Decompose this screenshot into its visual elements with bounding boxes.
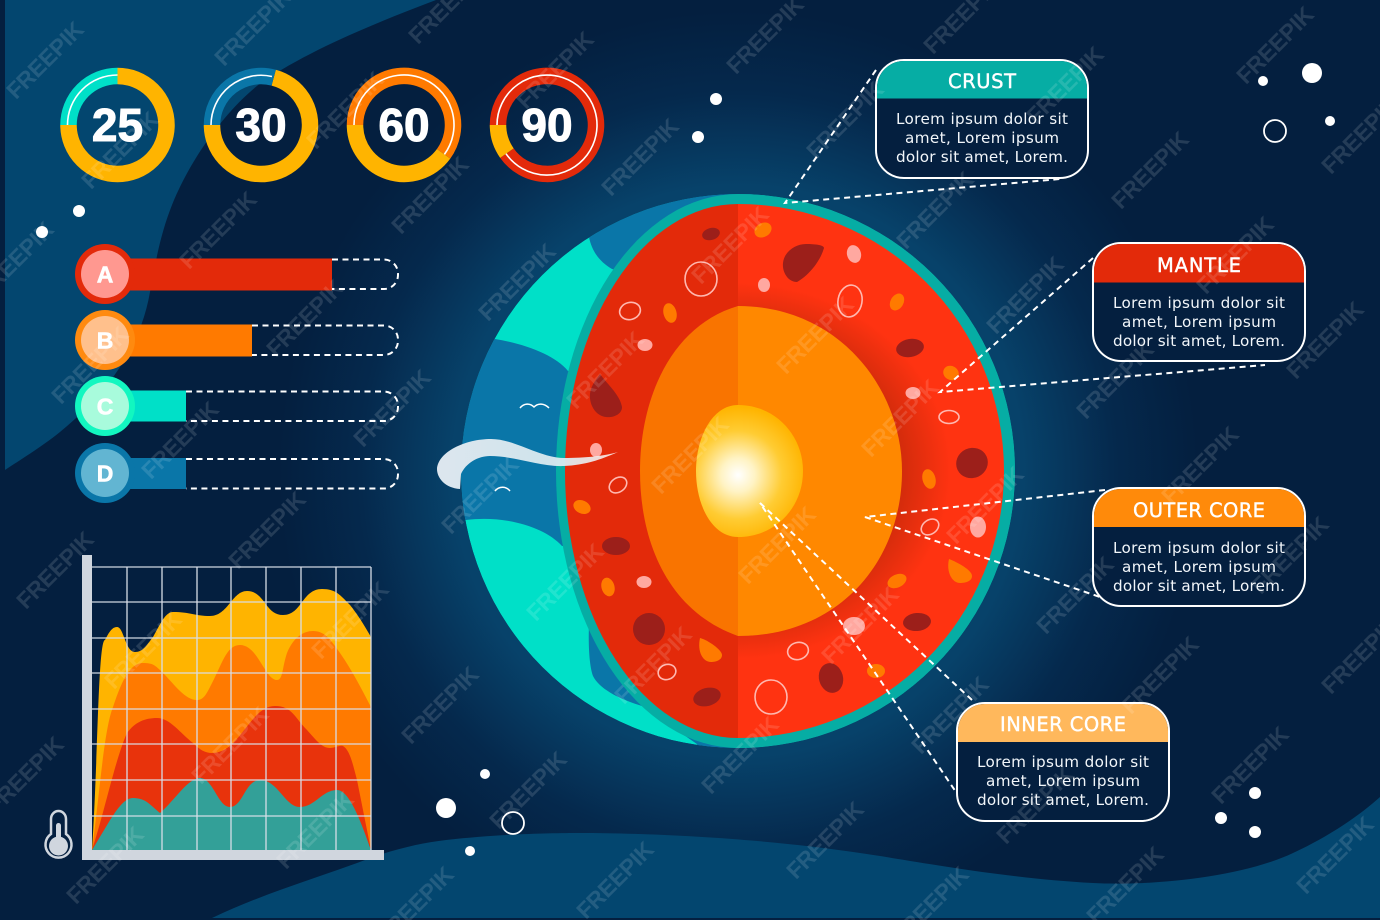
callout: mantle: MANTLE [1157,254,1241,277]
bar B: B [97,328,113,354]
watermark text: FREEPIK [46,321,134,409]
watermark text: FREEPIK [174,186,262,274]
callout: inner core [957,703,1169,821]
callout: outer core: amet, Lorem ipsum [1122,558,1276,576]
bar B [75,310,398,370]
icon: birds [495,404,549,491]
watermark text: FREEPIK [306,576,394,664]
callout: inner core: INNER CORE [1000,713,1126,736]
outer core right half [738,306,902,636]
progress ring 60 [354,75,454,174]
callout: outer core: dolor sit amet, Lorem. [1113,577,1285,595]
watermark text: FREEPIK [1291,811,1379,899]
leader lines [760,70,1265,795]
watermark text: FREEPIK [1156,421,1244,509]
watermark text: FREEPIK [1281,296,1369,384]
callout: mantle [1093,243,1305,361]
icon: thermometer [46,811,72,858]
callout: crust: Lorem ipsum dolor sit [896,110,1068,128]
callout: crust: amet, Lorem ipsum [905,129,1059,147]
watermark text: FREEPIK [348,364,436,452]
watermark text: FREEPIK [1191,211,1279,299]
watermark text: FREEPIK [436,451,524,539]
callout: mantle: amet, Lorem ipsum [1122,313,1276,331]
inner core [696,405,803,537]
watermark text: FREEPIK [906,671,994,759]
callout: outer core [1093,488,1305,606]
area: red [92,706,371,850]
watermark text: FREEPIK [76,106,164,194]
watermark text: FREEPIK [223,486,311,574]
watermark text: FREEPIK [61,821,149,909]
chart grid [92,567,371,850]
watermark text: FREEPIK [781,796,869,884]
watermark text: FREEPIK [301,66,389,154]
progress ring 25 [68,75,166,174]
callout: crust [876,60,1088,178]
progress ring 90: 90 [521,99,573,151]
bar C [75,376,398,436]
watermark text: FREEPIK [609,621,697,709]
callout: crust: dolor sit amet, Lorem. [896,148,1068,166]
watermark text: FREEPIK [473,238,561,326]
watermark text: FREEPIK [271,786,359,874]
watermark text: FREEPIK [991,761,1079,849]
watermark text: FREEPIK [484,746,572,834]
watermark text: FREEPIK [1031,551,1119,639]
progress ring 90 [497,75,597,175]
area: orange [92,631,371,850]
bar D [75,443,398,503]
watermark text: FREEPIK [99,606,187,694]
watermark text: FREEPIK [186,701,274,789]
watermark text: FREEPIK [696,711,784,799]
watermark text: FREEPIK [1231,1,1319,89]
watermark text: FREEPIK [1206,721,1294,809]
area chart [82,555,384,860]
watermark text: FREEPIK [891,166,979,254]
watermark text: FREEPIK [686,201,774,289]
crust [556,194,1015,748]
callout: mantle: Lorem ipsum dolor sit [1113,294,1285,312]
mantle right half [738,204,1004,738]
mantle rocks [571,219,993,714]
watermark text: FREEPIK [261,274,349,362]
watermark text: FREEPIK [1106,126,1194,214]
globe ocean/land [440,180,1015,760]
watermark text: FREEPIK [136,396,224,484]
watermark text: FREEPIK [1246,511,1334,599]
watermark text: FREEPIK [771,291,859,379]
watermark text: FREEPIK [1071,336,1159,424]
progress ring 60: 60 [378,99,430,151]
progress ring 25: 25 [92,99,143,151]
watermark text: FREEPIK [1,16,89,104]
callout: inner core: amet, Lorem ipsum [986,772,1140,790]
watermark text: FREEPIK [856,374,944,462]
outer core left half [640,306,738,636]
earth globe [437,180,1015,760]
callout: mantle: dolor sit amet, Lorem. [1113,332,1285,350]
area: teal [92,778,371,850]
bar A [75,244,398,304]
callout: inner core: dolor sit amet, Lorem. [977,791,1149,809]
watermark text: FREEPIK [521,538,609,626]
callout: outer core: OUTER CORE [1133,499,1265,522]
watermark text: FREEPIK [1021,41,1109,129]
callout: inner core: Lorem ipsum dolor sit [977,753,1149,771]
area: yellow [92,589,371,850]
watermark text: FREEPIK [941,461,1029,549]
watermark text: FREEPIK [1116,631,1204,719]
watermark text: FREEPIK [386,151,474,239]
watermark text: FREEPIK [511,26,599,114]
callout: crust: CRUST [948,70,1016,93]
callout: outer core: Lorem ipsum dolor sit [1113,539,1285,557]
progress ring 30: 30 [235,99,287,151]
bar D: D [97,460,113,486]
chart axes [82,555,384,860]
icon: wind swirl [437,439,618,489]
progress ring 30 [211,75,310,174]
bar A: A [97,262,113,288]
mantle left half [565,204,738,738]
watermark text: FREEPIK [11,526,99,614]
watermark text: FREEPIK [816,581,904,669]
bar C: C [97,394,113,420]
watermark text: FREEPIK [596,113,684,201]
watermark text: FREEPIK [561,326,649,414]
background blob: bottom [212,797,1380,918]
watermark text: FREEPIK [733,501,821,589]
watermark text: FREEPIK [396,661,484,749]
watermark text: FREEPIK [801,76,889,164]
watermark text: FREEPIK [646,411,734,499]
background blob: top left [5,0,436,470]
watermark text: FREEPIK [981,251,1069,339]
